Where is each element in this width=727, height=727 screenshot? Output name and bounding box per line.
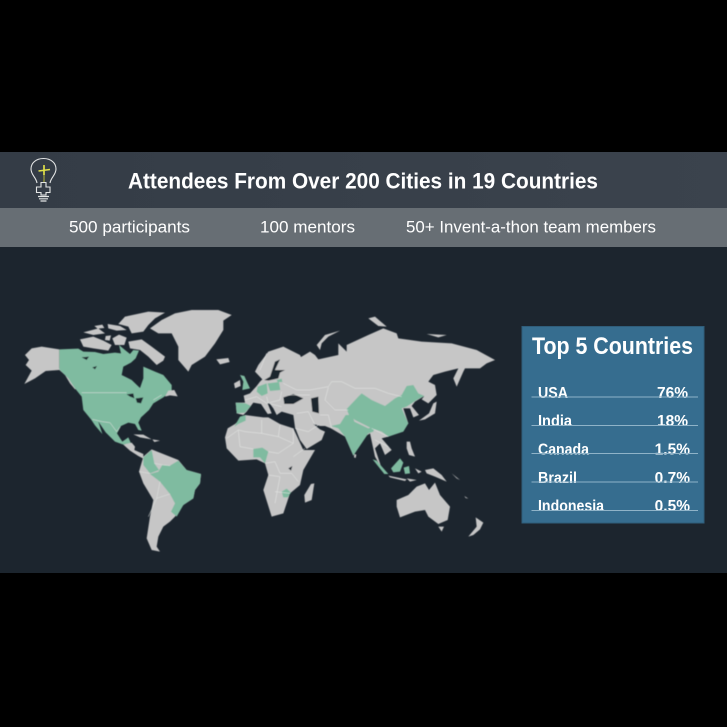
Morocco (234, 415, 246, 427)
Poland (268, 382, 280, 391)
North America highlighted countries (59, 345, 172, 445)
Greenland (150, 310, 232, 372)
row: Brazil (532, 470, 698, 487)
stat: team members: 50+ Invent-a-thon team members (406, 218, 656, 236)
Spain (236, 403, 251, 413)
Caspian Sea (311, 397, 319, 413)
row: India (532, 413, 698, 430)
Iceland (216, 358, 230, 364)
Newfoundland and maritime tip (165, 390, 178, 397)
Baltic Sea (264, 359, 285, 381)
Arctic islands (80, 312, 165, 365)
map: Europe, Africa, Asia, Oceania (225, 317, 495, 537)
Australia (397, 483, 450, 524)
Brazil (150, 461, 201, 517)
row: Indonesia: 0.5% (655, 498, 690, 515)
Colombia (143, 450, 159, 473)
Germany (257, 383, 268, 396)
Cuba and Caribbean (133, 434, 160, 442)
map: Americas (24, 310, 232, 552)
United Kingdom (240, 375, 250, 390)
Zimbabwe (282, 489, 291, 497)
icon: light bulb (31, 158, 56, 201)
Sulawesi (404, 466, 410, 474)
title: Attendees From Over 200 Cities in 19 Countries (128, 168, 598, 194)
China (347, 385, 424, 437)
Central America (123, 443, 143, 459)
New Zealand (468, 517, 483, 537)
row: Indonesia (532, 498, 698, 515)
stat: participants: 500 participants (69, 218, 190, 236)
India and Pakistan (331, 415, 375, 456)
row: Canada (532, 442, 698, 458)
Java (388, 476, 407, 481)
row: India: India (538, 413, 572, 430)
Tasmania (438, 527, 444, 532)
background panel (0, 152, 727, 573)
row: Canada: 1.5% (655, 442, 690, 458)
row: Brazil: 0.7% (655, 470, 690, 487)
row: India: 18% (657, 413, 688, 430)
world map (24, 310, 495, 552)
row: Brazil: Brazil (538, 470, 577, 487)
Japan (419, 402, 437, 421)
Nigeria (253, 448, 268, 463)
stats band (0, 208, 727, 247)
row: USA: 76% (657, 385, 688, 402)
Africa (225, 415, 315, 517)
Lake Victoria (288, 466, 292, 471)
row: Indonesia: Indonesia (538, 498, 604, 515)
panel: top 5 countries (522, 326, 704, 523)
row: Canada: Canada (538, 442, 589, 458)
panel heading: Top 5 Countries (532, 333, 693, 360)
Madagascar (304, 483, 314, 503)
Sumatra (373, 459, 388, 474)
Arctic Russia islands (317, 317, 447, 350)
Borneo (391, 458, 403, 472)
row: USA: USA (538, 385, 568, 402)
borders (227, 353, 402, 503)
Ireland (234, 380, 241, 388)
header band (0, 152, 727, 208)
row: USA (532, 385, 698, 402)
Alaska (24, 347, 78, 389)
Southeast Asia islands (407, 442, 468, 499)
borders (82, 393, 170, 517)
lakes (82, 357, 143, 403)
Eurasia (236, 328, 495, 468)
South America (139, 449, 201, 552)
Black Sea (283, 394, 303, 404)
stat: mentors: 100 mentors (260, 218, 355, 236)
Lithuania (277, 379, 282, 382)
Sri Lanka (354, 454, 356, 458)
